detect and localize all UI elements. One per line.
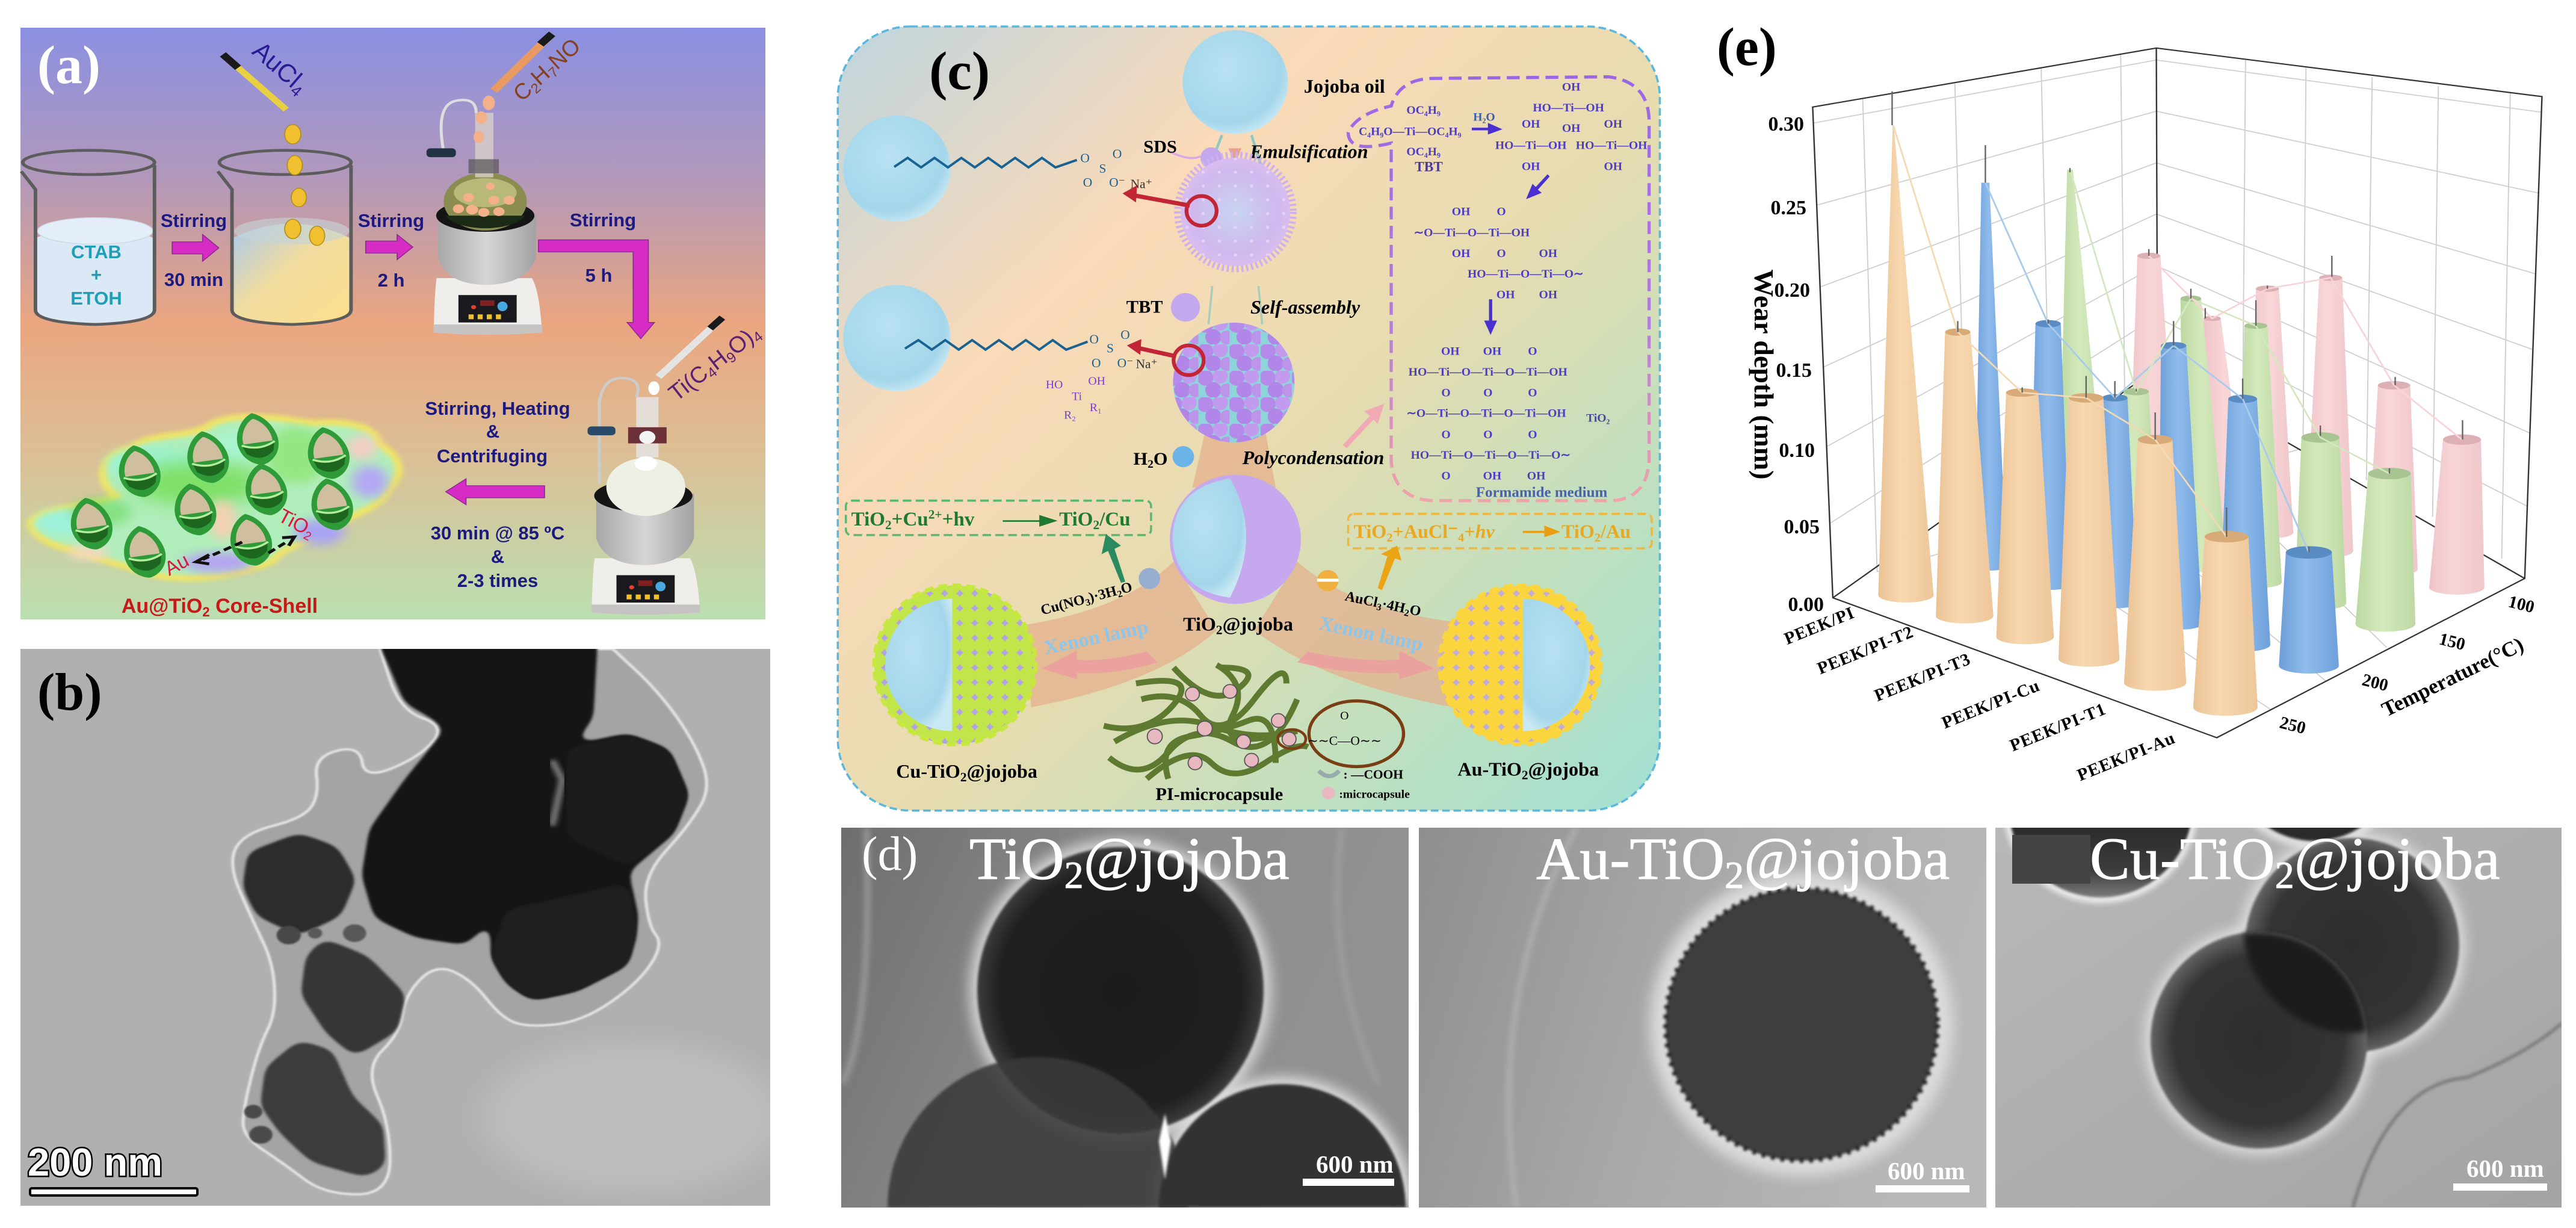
- title: Au-TiO2@jojoba: 2: [1725, 854, 1744, 896]
- formula arrows: [1343, 123, 1549, 448]
- H2O label and bead: O: [1154, 448, 1168, 469]
- 3D chart box, grid and cones: [1812, 48, 2542, 737]
- orange cones: 250 °C: [1879, 125, 2258, 716]
- equation box: TiO2 to TiO2/Au: [1348, 514, 1652, 548]
- panel (e): 3D wear depth cone chart: [1717, 17, 2542, 785]
- title: Au-TiO2@jojoba: Au-TiO: [1536, 825, 1725, 892]
- copper nitrate reagent: Cu(NO: [1039, 592, 1087, 618]
- scale bar: 600 nm: 600 nm: [1316, 1150, 1394, 1178]
- caption: Au@TiO2 Core-Shell: Au@TiO: [122, 595, 202, 618]
- jojoba oil label: Jojoba oil: [1304, 76, 1385, 97]
- x-axis sample labels: [1782, 603, 2178, 785]
- Xenon lamp label right: Xenon lamp: [1317, 612, 1425, 656]
- label: Ti(C4H9O)4: O): [723, 324, 759, 360]
- ester bond callout: ∼∼C—O∼∼: [1308, 734, 1382, 748]
- TiO2 polycondensation formulas: HO—Ti—OH: [1533, 102, 1604, 114]
- TiO2 polycondensation formulas: OC₄H₉: [1406, 104, 1441, 117]
- equation box: TiO2 to TiO2/Au: 4: [1458, 532, 1464, 544]
- TiO2 polycondensation formulas: O: [1496, 205, 1506, 218]
- panel letter (a): (a): [37, 36, 100, 95]
- x-axis sample labels: PEEK/PI-T1: [2007, 699, 2109, 755]
- panel letter (e): (e): [1717, 17, 1777, 77]
- title: Cu-TiO2@jojoba: Cu-TiO: [2090, 825, 2275, 892]
- y-axis title: Wear depth (mm): [1749, 269, 1779, 480]
- TiO2 polycondensation formulas: HO—Ti—OH: [1495, 139, 1566, 152]
- x-axis sample labels: PEEK/PI-T3: [1871, 650, 1974, 705]
- x-axis sample labels: PEEK/PI: [1782, 603, 1858, 649]
- error bars: [1892, 91, 2462, 553]
- label: Ti(C4H9O)4: Ti(C: [664, 361, 713, 406]
- green cones: 150 °C: [2059, 170, 2415, 631]
- tan flow bands: [1023, 286, 1459, 707]
- label: Ti(C4H9O)4: 4: [704, 364, 720, 382]
- enlarged droplet with SDS molecule (bottom): R₁: [1090, 402, 1102, 414]
- dashed box: TiO2 chemistry: [1348, 77, 1649, 501]
- TiO2 polycondensation formulas: O: [1528, 429, 1537, 441]
- self-assembled sphere: [1173, 323, 1294, 442]
- enlarged droplet with SDS molecule (top): [843, 116, 1152, 222]
- label: Ti(C4H9O)4: 4: [750, 328, 766, 346]
- y-axis tick labels: 0.25: [1770, 197, 1806, 219]
- enlarged droplet with SDS molecule (top): O: [1080, 150, 1090, 165]
- label: Ti(C4H9O)4: 9: [723, 349, 740, 367]
- panel (d): TEM micrographs of microcapsules: [841, 668, 2562, 1208]
- panel (a): Au@TiO2 synthesis scheme: [20, 28, 766, 619]
- equation box: TiO2 to TiO2/Cu: [846, 501, 1151, 535]
- label: Formamide medium: Formamide medium: [1476, 485, 1608, 500]
- connecting series lines: [1893, 125, 2462, 553]
- beaker label: [70, 241, 122, 309]
- TiO2 polycondensation formulas: OH: [1522, 118, 1540, 131]
- Xenon lamp label left: Xenon lamp: [1042, 616, 1150, 659]
- label: C2H7NO: NO: [544, 33, 585, 74]
- process labels: stirring times: &: [486, 421, 499, 442]
- label: PI-microcapsule: PI-microcapsule: [1155, 784, 1283, 804]
- scale bar: 600 nm: 600 nm: [1888, 1157, 1965, 1185]
- enlarged droplet with SDS molecule (top): O: [1113, 146, 1122, 161]
- panel (a) background: [20, 28, 765, 619]
- label: TiO2: 2: [301, 529, 314, 544]
- TEM micrograph image: [20, 649, 770, 1206]
- enlarged droplet with SDS molecule (bottom): Na⁺: [1136, 357, 1158, 371]
- caption: Au@TiO2 Core-Shell: 2: [202, 604, 210, 619]
- process labels: stirring times: 2-3 times: [457, 570, 538, 591]
- TiO2 polycondensation formulas: O: [1441, 429, 1451, 441]
- process labels: stirring times: 5 h: [585, 265, 612, 286]
- y-axis tick labels: 0.05: [1784, 516, 1820, 538]
- enlarged droplet with SDS molecule (top): S: [1099, 161, 1106, 176]
- TiO2 polycondensation formulas: OH: [1452, 205, 1470, 218]
- legend: COOH and microcapsule: : —COOH: [1344, 768, 1403, 782]
- gold chloride reagent: 2: [1403, 608, 1410, 619]
- gold chloride reagent: 3: [1376, 602, 1382, 613]
- equation box: TiO2 to TiO2/Au: TiO: [1354, 521, 1386, 542]
- TiO2 polycondensation formulas: OH: [1441, 346, 1460, 358]
- process labels: stirring times: 30 min @ 85 ºC: [431, 523, 564, 544]
- panel letter (b): (b): [37, 663, 102, 722]
- copper nitrate reagent: 2: [1116, 589, 1123, 600]
- equation box: TiO2 to TiO2/Cu: TiO: [1059, 509, 1093, 530]
- TiO2 polycondensation formulas: OH: [1483, 470, 1501, 482]
- equation box: TiO2 to TiO2/Cu: TiO: [851, 509, 885, 530]
- scale bar: 600 nm: [1876, 1157, 1969, 1192]
- TiO2 polycondensation formulas: OH: [1562, 81, 1580, 93]
- arrows: magenta process arrows: [172, 235, 655, 504]
- enlarged droplet with SDS molecule (bottom): O⁻: [1117, 356, 1133, 370]
- title: TiO2@jojoba: 2: [1064, 854, 1084, 896]
- stirrer with flask: first step: [427, 34, 552, 335]
- equation box: TiO2 to TiO2/Au: hv: [1475, 521, 1495, 542]
- polycondensation label: Polycondensation: [1242, 447, 1384, 468]
- label: C2H7NO: H: [526, 61, 555, 90]
- equation box: TiO2 to TiO2/Cu: +Cu: [892, 509, 928, 530]
- equation box: TiO2 to TiO2/Au: 2: [1386, 532, 1393, 544]
- grid lines: [1812, 54, 2542, 710]
- process labels: stirring times: &: [491, 546, 504, 567]
- gold chloride reagent: ·4H: [1380, 597, 1407, 616]
- label: Au: Au: [161, 549, 193, 580]
- TiO2 polycondensation formulas: OH: [1452, 247, 1470, 260]
- label: Cu-TiO2@jojoba: @jojoba: [967, 761, 1037, 782]
- TiO2 polycondensation formulas: TBT: [1415, 158, 1443, 174]
- temperature tick labels: 200: [2360, 670, 2390, 695]
- TiO2 polycondensation formulas: O: [1483, 429, 1492, 441]
- scale bar: 600 nm: [1303, 1150, 1394, 1186]
- beaker label: CTAB: [71, 241, 122, 262]
- H2O label and bead: 2: [1147, 458, 1154, 471]
- legend: COOH and microcapsule: :microcapsule: [1339, 789, 1410, 801]
- process labels: stirring times: Stirring: [358, 210, 424, 231]
- label: AuCl4: AuCl: [247, 36, 307, 93]
- label: TiO2: TiO: [275, 504, 313, 539]
- enlarged droplet with SDS molecule (bottom): O: [1090, 332, 1099, 346]
- x-axis sample labels: PEEK/PI-Cu: [1939, 676, 2043, 733]
- enlarged droplet with SDS molecule (top): O⁻: [1109, 175, 1125, 190]
- equation box: TiO2 to TiO2/Cu: 2: [885, 518, 892, 532]
- y-axis tick labels: 0.00: [1788, 594, 1824, 616]
- scale bar: 200 nm: [28, 1140, 197, 1195]
- temperature tick labels: [2278, 592, 2536, 738]
- enlarged droplet with SDS molecule (bottom): R₂: [1064, 409, 1076, 421]
- process labels: stirring times: 2 h: [378, 270, 404, 291]
- y-axis tick labels: 0.10: [1779, 439, 1815, 462]
- panel (c) dashed background: [838, 26, 1660, 811]
- pipette: AuCl4: [223, 54, 286, 110]
- TiO2 polycondensation formulas: H₂O: [1473, 111, 1495, 124]
- enlarged droplet with SDS molecule (bottom): O: [1120, 327, 1130, 342]
- jojoba oil droplet: [1168, 30, 1288, 170]
- label: Au-TiO2@jojoba: @jojoba: [1528, 759, 1599, 780]
- TiO2 polycondensation formulas: OH: [1562, 122, 1580, 135]
- beaker label: +: [91, 264, 102, 285]
- TiO2 polycondensation formulas: HO—Ti—OH: [1576, 139, 1647, 152]
- equation box: TiO2 to TiO2/Au: /Au: [1600, 521, 1631, 542]
- TiO2 polycondensation formulas: HO—Ti—O—Ti—O—Ti—O∼: [1411, 449, 1571, 462]
- pink cones: 100 °C: [2128, 253, 2485, 595]
- TiO2 polycondensation formulas: HO—Ti—O—Ti—O—Ti—OH: [1409, 366, 1568, 379]
- title: Cu-TiO2@jojoba: @jojoba: [2294, 825, 2500, 892]
- TiO2 polycondensation formulas: OH: [1483, 346, 1501, 358]
- orange upward arrow: [1378, 546, 1401, 590]
- legend: COOH and microcapsule: [1318, 768, 1410, 801]
- stirrer with flask: second step: [587, 318, 722, 615]
- label: TiO2@jojoba: TiO: [1183, 614, 1216, 634]
- TiO2 polycondensation formulas: OH: [1539, 247, 1557, 260]
- copper nitrate reagent: )·3H: [1087, 583, 1119, 606]
- TiO2 polycondensation formulas: O: [1496, 247, 1506, 260]
- label: Cu-TiO2@jojoba: Cu-TiO: [896, 761, 960, 782]
- label: TiO2@jojoba: @jojoba: [1223, 614, 1293, 634]
- panel letter (d): (d): [862, 828, 918, 881]
- equation box: TiO2 to TiO2/Cu: /Cu: [1099, 509, 1131, 530]
- TiO2 polycondensation formulas: OH: [1496, 289, 1515, 301]
- H2O label and bead: [1133, 446, 1194, 471]
- label: C2H7NO: C: [508, 77, 537, 106]
- copper nitrate reagent: [1039, 568, 1160, 620]
- self-assembly label: Self-assembly: [1250, 297, 1361, 318]
- enlarged droplet with SDS molecule (top): O: [1083, 175, 1092, 190]
- equation box: TiO2 to TiO2/Cu: +hv: [942, 509, 975, 530]
- label: Au-TiO2@jojoba: Au-TiO: [1457, 759, 1522, 780]
- TiO2 polycondensation formulas: OC₄H₉: [1406, 146, 1441, 158]
- title: TiO2@jojoba: @jojoba: [1084, 825, 1290, 892]
- enlarged droplet with SDS molecule (top): Na⁺: [1131, 177, 1152, 191]
- TiO2 polycondensation formulas: OH: [1539, 289, 1557, 301]
- enlarged droplet with SDS molecule (bottom): OH: [1089, 375, 1105, 388]
- green upward arrow: [1102, 534, 1125, 583]
- SDS label: SDS: [1143, 137, 1177, 157]
- equation box: TiO2 to TiO2/Au: +AuCl⁻: [1393, 521, 1458, 542]
- emulsified droplet sphere: [1178, 155, 1293, 268]
- red arrow and circle (bottom): [1127, 339, 1203, 375]
- label: Ti(C4H9O)4: H: [704, 346, 732, 376]
- y-axis tick labels: 0.15: [1776, 359, 1812, 382]
- TiO2 polycondensation formulas: O: [1441, 470, 1451, 482]
- panel (b): TEM micrograph of Au@TiO2: [20, 626, 785, 1206]
- x-axis sample labels: PEEK/PI-T2: [1814, 622, 1917, 678]
- label: TiO2@jojoba: 2: [1216, 623, 1223, 637]
- equation box: TiO2 to TiO2/Au: TiO: [1561, 521, 1595, 542]
- process labels: stirring times: 30 min: [164, 269, 223, 290]
- TiO2 polycondensation formulas: ∼O—Ti—O—Ti—O—Ti—OH: [1406, 408, 1566, 420]
- TiO2 polycondensation formulas: O: [1528, 346, 1537, 358]
- TiO2 polycondensation formulas: O: [1483, 386, 1492, 399]
- PI-microcapsule network: [1104, 665, 1308, 779]
- temperature tick labels: 250: [2278, 713, 2308, 738]
- TEM image: Au-TiO2@jojoba: [1419, 828, 1986, 1208]
- box frame: [1812, 48, 2542, 737]
- temperature axis title: Temperature(°C): [2378, 633, 2527, 722]
- TEM image: TiO2@jojoba: [841, 828, 1409, 1208]
- arrow to Cu sphere: [1042, 651, 1158, 679]
- H2O label and bead: H: [1133, 448, 1147, 469]
- scale bar: 200 nm: 200 nm: [28, 1140, 162, 1184]
- equation box: TiO2 to TiO2/Au: 2: [1595, 532, 1601, 544]
- title: Cu-TiO2@jojoba: 2: [2275, 854, 2294, 896]
- enlarged droplet with SDS molecule (bottom): S: [1107, 341, 1114, 355]
- TBT label and bead: TBT: [1126, 296, 1163, 317]
- process labels: stirring times: Stirring: [161, 210, 227, 231]
- arrow to Au sphere: [1297, 651, 1434, 679]
- process labels: stirring times: Stirring, Heating: [425, 398, 570, 419]
- label: C2H7NO: 7: [545, 64, 561, 81]
- caption: Au@TiO2 Core-Shell: Core-Shell: [210, 595, 318, 618]
- copper nitrate reagent: 3: [1084, 597, 1092, 608]
- temperature tick labels: 150: [2437, 629, 2467, 654]
- blue cones: 200 °C: [1974, 183, 2339, 674]
- ester bond callout: O: [1340, 710, 1348, 722]
- beaker: CTAB + ETOH solution: [21, 150, 155, 324]
- TiO2 polycondensation formulas: OH: [1604, 161, 1622, 173]
- TiO2 polycondensation formulas: TiO₂: [1586, 412, 1610, 425]
- label: Cu-TiO2@jojoba: 2: [960, 770, 967, 784]
- scale bar: 600 nm: [2453, 1155, 2547, 1191]
- enlarged droplet with SDS molecule (bottom): Ti: [1072, 391, 1083, 403]
- panel letter (c): (c): [929, 40, 990, 101]
- TiO2 polycondensation formulas: OH: [1604, 118, 1622, 131]
- TiO2@jojoba core-shell sphere: [1170, 475, 1301, 604]
- scale bar: 600 nm: 600 nm: [2466, 1155, 2544, 1182]
- label: Au-TiO2@jojoba: 2: [1522, 768, 1528, 783]
- core-shell particle cluster: [31, 411, 399, 580]
- equation box: TiO2 to TiO2/Cu: 2+: [928, 507, 942, 522]
- TiO2 polycondensation formulas: O: [1528, 386, 1537, 399]
- beaker label: ETOH: [70, 288, 122, 309]
- Au-TiO2@jojoba sphere: [1439, 586, 1601, 745]
- TBT label and bead: [1126, 293, 1200, 321]
- beaker: mixed gold solution: [218, 125, 351, 324]
- TiO2 polycondensation formulas: [1359, 81, 1647, 482]
- title: Au-TiO2@jojoba: @jojoba: [1744, 825, 1950, 892]
- label: C2H7NO: 2: [528, 79, 544, 96]
- TiO2 polycondensation formulas: C₄H₉O—Ti—OC₄H₉: [1359, 126, 1462, 138]
- TiO2 polycondensation formulas: O: [1441, 386, 1451, 399]
- equation box: TiO2 to TiO2/Au: +: [1464, 521, 1475, 542]
- TiO2 polycondensation formulas: ∼O—Ti—O—Ti—OH: [1414, 227, 1530, 239]
- title: TiO2@jojoba: TiO: [969, 825, 1064, 892]
- gold chloride reagent: O: [1408, 602, 1422, 619]
- TiO2 polycondensation formulas: OH: [1522, 161, 1540, 173]
- TEM image: Cu-TiO2@jojoba: [1995, 828, 2562, 1208]
- process labels: stirring times: Stirring: [570, 209, 636, 231]
- Cu-TiO2@jojoba sphere: [874, 586, 1036, 745]
- enlarged droplet with SDS molecule (bottom): HO: [1046, 379, 1063, 391]
- gold chloride reagent: AuCl: [1344, 589, 1379, 610]
- TiO2 polycondensation formulas: HO—Ti—O—Ti—O∼: [1468, 268, 1584, 281]
- emulsification label: Emulsification: [1249, 141, 1368, 162]
- gold chloride reagent: [1317, 570, 1422, 621]
- process labels: stirring times: Centrifuging: [437, 445, 548, 467]
- ester bond callout: [1278, 701, 1404, 767]
- enlarged droplet with SDS molecule (bottom): O: [1092, 356, 1101, 370]
- y-axis tick labels: 0.30: [1768, 113, 1804, 135]
- label: AuCl4: 4: [287, 81, 306, 101]
- temperature tick labels: 100: [2506, 592, 2536, 617]
- red arrow and circle (top): [1123, 185, 1217, 226]
- x-axis sample labels: PEEK/PI-Au: [2074, 728, 2178, 785]
- panel (c): TiO2@jojoba synthesis scheme: [838, 26, 1660, 811]
- y-axis tick labels: 0.20: [1774, 279, 1810, 302]
- equation box: TiO2 to TiO2/Cu: 2: [1093, 518, 1099, 532]
- y-axis tick labels: [1768, 113, 1824, 616]
- TiO2 polycondensation formulas: OH: [1527, 470, 1545, 482]
- copper nitrate reagent: O: [1119, 579, 1134, 597]
- enlarged droplet with SDS molecule (bottom): [843, 285, 1158, 421]
- process labels: stirring times: [161, 209, 636, 591]
